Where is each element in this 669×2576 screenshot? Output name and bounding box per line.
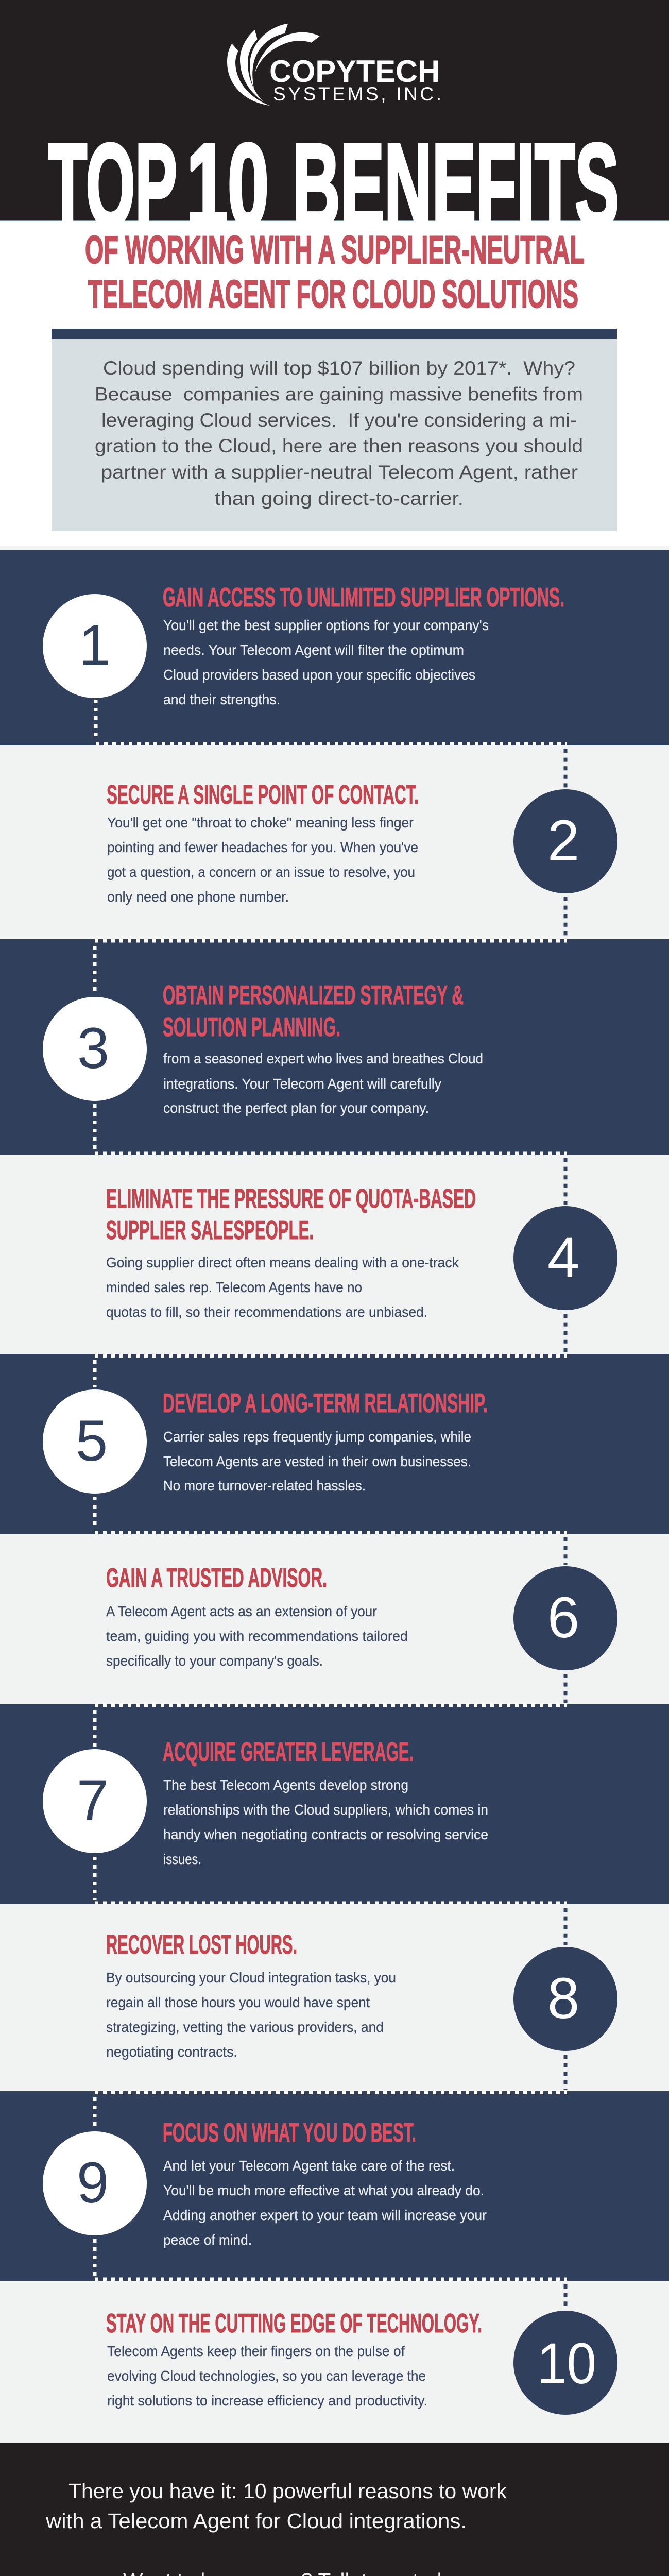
panel: benefit 5 <box>0 1354 669 1534</box>
panel: benefit 3: SOLUTION PLANNING. <box>163 1012 340 1042</box>
panel: benefit 2: You'll get one "throat to choke" meaning less finger <box>107 815 414 831</box>
panel: benefit 4: Going supplier direct often means dealing with a one-track <box>106 1255 459 1270</box>
panel: benefit 2 <box>0 745 669 939</box>
panel: benefit 8: strategizing, vetting the various providers, and <box>106 2019 384 2035</box>
panel: benefit 1: and their strengths. <box>163 691 280 707</box>
logo: Copytech white: SYSTEMS, INC. <box>273 83 441 105</box>
panel: benefit 1: Cloud providers based upon your specific objectives <box>163 667 475 683</box>
panel: benefit 3: construct the perfect plan for your company. <box>163 1100 429 1116</box>
panel: benefit 7: ACQUIRE GREATER LEVERAGE. <box>163 1737 414 1767</box>
panel: benefit 4: minded sales rep. Telecom Agents have no <box>106 1279 362 1295</box>
panel: benefit 7: handy when negotiating contracts or resolving service <box>163 1826 488 1842</box>
panel: benefit 9: Adding another expert to your team will increase your <box>163 2207 487 2223</box>
panel: benefit 7 <box>0 1704 669 1904</box>
panel: benefit 8 <box>0 1904 669 2091</box>
logo: Copytech white <box>227 24 441 106</box>
panel: benefit 10: Telecom Agents keep their fingers on the pulse of <box>107 2343 405 2359</box>
closing panel <box>0 2443 669 2576</box>
panel: benefit 3: 3 <box>77 1016 109 1080</box>
panel: benefit 3: integrations. Your Telecom Agent will carefully <box>163 1076 441 1092</box>
panel: benefit 1: 1 <box>79 613 111 677</box>
panel: benefit 8: By outsourcing your Cloud integration tasks, you <box>106 1970 396 1986</box>
panel: benefit 6 <box>0 1534 669 1704</box>
closing panel: There you have it: 10 powerful reasons to work <box>68 2479 507 2503</box>
panel: benefit 9: peace of mind. <box>163 2232 252 2248</box>
panel: benefit 2: got a question, a concern or an issue to resolve, you <box>107 864 415 880</box>
panel: benefit 7: The best Telecom Agents develop strong <box>163 1777 408 1793</box>
panel: benefit 8: regain all those hours you would have spent <box>106 1994 370 2010</box>
intro box: partner with a supplier-neutral Telecom Agent, rather <box>101 462 578 483</box>
panel: benefit 6: A Telecom Agent acts as an extension of your <box>106 1603 377 1619</box>
panel: benefit 2: 2 <box>547 808 579 873</box>
panel: benefit 10: right solutions to increase efficiency and productivity. <box>107 2393 427 2409</box>
panel: benefit 4: 4 <box>547 1225 579 1290</box>
panel: benefit 7: 7 <box>77 1768 109 1833</box>
logo: Copytech white: COPYTECH <box>269 54 440 89</box>
panel: benefit 10: evolving Cloud technologies, so you can leverage the <box>107 2368 426 2384</box>
panel: benefit 2: only need one phone number. <box>107 889 289 905</box>
panel: benefit 9: And let your Telecom Agent take care of the rest. <box>163 2158 455 2174</box>
header panel <box>0 0 669 221</box>
panel: benefit 8: negotiating contracts. <box>106 2044 237 2060</box>
panel: benefit 5: 5 <box>76 1409 108 1473</box>
intro box: than going direct-to-carrier. <box>215 488 464 509</box>
panel: benefit 6: specifically to your company's goals. <box>106 1653 323 1669</box>
panel: benefit 9: You'll be much more effective at what you already do. <box>163 2182 484 2198</box>
panel: benefit 9: 9 <box>77 2150 109 2215</box>
closing panel: with a Telecom Agent for Cloud integrations. <box>45 2509 467 2533</box>
panel: benefit 3: from a seasoned expert who lives and breathes Cloud <box>163 1050 483 1066</box>
panel: benefit 9: FOCUS ON WHAT YOU DO BEST. <box>163 2118 416 2148</box>
intro box: gration to the Cloud, here are then reasons you should <box>95 435 583 456</box>
panel: benefit 6: GAIN A TRUSTED ADVISOR. <box>106 1563 327 1593</box>
panel: benefit 2: SECURE A SINGLE POINT OF CONTACT. <box>107 780 419 810</box>
panel: benefit 5: Telecom Agents are vested in their own businesses. <box>163 1453 471 1469</box>
panel: benefit 4: SUPPLIER SALESPEOPLE. <box>106 1215 314 1245</box>
panel: benefit 8: 8 <box>547 1966 579 2030</box>
panel: benefit 2: pointing and fewer headaches for you. When you've <box>107 839 418 855</box>
panel: benefit 3 <box>0 939 669 1155</box>
panel: benefit 10 <box>0 2281 669 2443</box>
panel: benefit 6: team, guiding you with recommendations tailored <box>106 1628 408 1644</box>
panel: benefit 7: relationships with the Cloud suppliers, which comes in <box>163 1802 488 1818</box>
intro box: leveraging Cloud services. If you're considering a mi- <box>101 410 577 431</box>
title: TOP <box>48 120 177 251</box>
intro box <box>52 329 617 531</box>
title: 10 <box>186 120 269 251</box>
panel: benefit 9 <box>0 2091 669 2281</box>
panel: benefit 10: 10 <box>537 2331 596 2396</box>
panel: benefit 6: 6 <box>547 1585 579 1650</box>
panel: benefit 5: No more turnover-related hassles. <box>163 1478 366 1494</box>
panel: benefit 8: RECOVER LOST HOURS. <box>106 1930 297 1960</box>
panel: benefit 5: Carrier sales reps frequently jump companies, while <box>163 1429 471 1445</box>
panel: benefit 4 <box>0 1155 669 1354</box>
title <box>48 120 619 251</box>
panel: benefit 1: needs. Your Telecom Agent will filter the optimum <box>163 642 464 658</box>
panel: benefit 1: You'll get the best supplier options for your company's <box>163 617 489 633</box>
intro box: Cloud spending will top $107 billion by 2017*. Why? <box>103 358 575 379</box>
intro box: Because companies are gaining massive benefits from <box>95 383 583 405</box>
subtitle <box>85 228 585 316</box>
panel: benefit 4: quotas to fill, so their recommendations are unbiased. <box>106 1304 427 1320</box>
panel: benefit 1 <box>0 550 669 745</box>
panel: benefit 3: OBTAIN PERSONALIZED STRATEGY & <box>163 980 464 1010</box>
panel: benefit 7: issues. <box>163 1851 201 1867</box>
